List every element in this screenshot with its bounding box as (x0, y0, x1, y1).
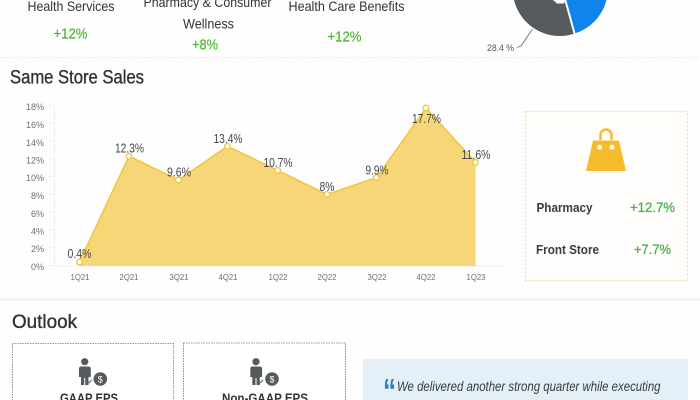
icon: person with coin (250, 358, 279, 386)
row: Front Store (536, 241, 671, 257)
area (80, 108, 476, 266)
y axis: 10% (26, 173, 44, 183)
segment: Health Services (28, 0, 114, 42)
x axis labels (70, 272, 486, 282)
row: Pharmacy (536, 199, 675, 215)
value labels: 0.4% (68, 247, 92, 261)
line (80, 108, 476, 262)
y axis: 18% (26, 102, 44, 112)
y axis: 12% (26, 156, 44, 166)
value labels: 13.4% (214, 132, 242, 146)
value labels: 9.9% (366, 164, 388, 178)
segment: Pharmacy and Consumer Wellness: +8% (192, 36, 218, 54)
area chart: same store sales (26, 102, 502, 282)
x axis labels: 4Q21 (218, 272, 238, 282)
row: Front Store: +7.7% (634, 241, 671, 257)
heading: Outlook: Outlook (12, 312, 77, 333)
quote panel (363, 359, 688, 400)
value labels: 8% (320, 180, 334, 194)
heading: Same Store Sales: Same Store Sales (10, 68, 144, 88)
x axis labels: 1Q21 (70, 272, 90, 282)
x axis labels: 3Q22 (368, 272, 387, 282)
segment: Pharmacy and Consumer Wellness: Wellness (183, 16, 234, 32)
x axis labels: 3Q21 (170, 272, 189, 282)
x axis labels: 2Q22 (318, 272, 337, 282)
pie leader line (517, 29, 532, 48)
y axis: 2% (31, 244, 44, 254)
y axis: 8% (31, 191, 44, 201)
card: Non-GAAP EPS (184, 343, 346, 400)
value labels (68, 112, 490, 261)
icon: person with coin: $ (269, 374, 275, 384)
value labels: 12.3% (115, 142, 144, 156)
value labels: 9.6% (167, 166, 191, 180)
x axis labels: 2Q21 (120, 272, 139, 282)
row: Front Store: Front Store (536, 242, 599, 257)
x axis labels: 1Q23 (466, 272, 486, 282)
x axis labels: 4Q22 (416, 272, 436, 282)
value labels: 10.7% (264, 156, 292, 170)
icon: person with coin (79, 358, 107, 386)
segment: Health Care Benefits: +12% (328, 28, 362, 46)
value labels: 17.7% (412, 112, 441, 126)
y axis: 16% (26, 120, 44, 130)
card: GAAP EPS (12, 344, 174, 400)
segment: Pharmacy and Consumer Wellness (144, 0, 272, 54)
pie label: 28.4 % (487, 43, 514, 53)
segment: Health Services: +12% (54, 26, 88, 42)
y axis: 4% (31, 226, 44, 236)
y axis: 6% (31, 209, 44, 219)
icon: person with coin: $ (98, 374, 103, 384)
markers (77, 105, 478, 265)
value labels: 11.6% (462, 148, 490, 162)
panel: segment growth (28, 0, 404, 54)
y axis (26, 102, 502, 272)
row: Pharmacy: Pharmacy (536, 200, 593, 215)
icon: shopping bag (586, 130, 626, 171)
y axis: 14% (26, 138, 44, 148)
y axis: 0% (31, 262, 44, 272)
pie chart (487, 0, 606, 53)
row: Pharmacy: +12.7% (630, 199, 675, 215)
segment: Health Care Benefits (288, 0, 404, 46)
panel: pharmacy and front store (526, 112, 688, 280)
x axis labels: 1Q22 (268, 272, 288, 282)
